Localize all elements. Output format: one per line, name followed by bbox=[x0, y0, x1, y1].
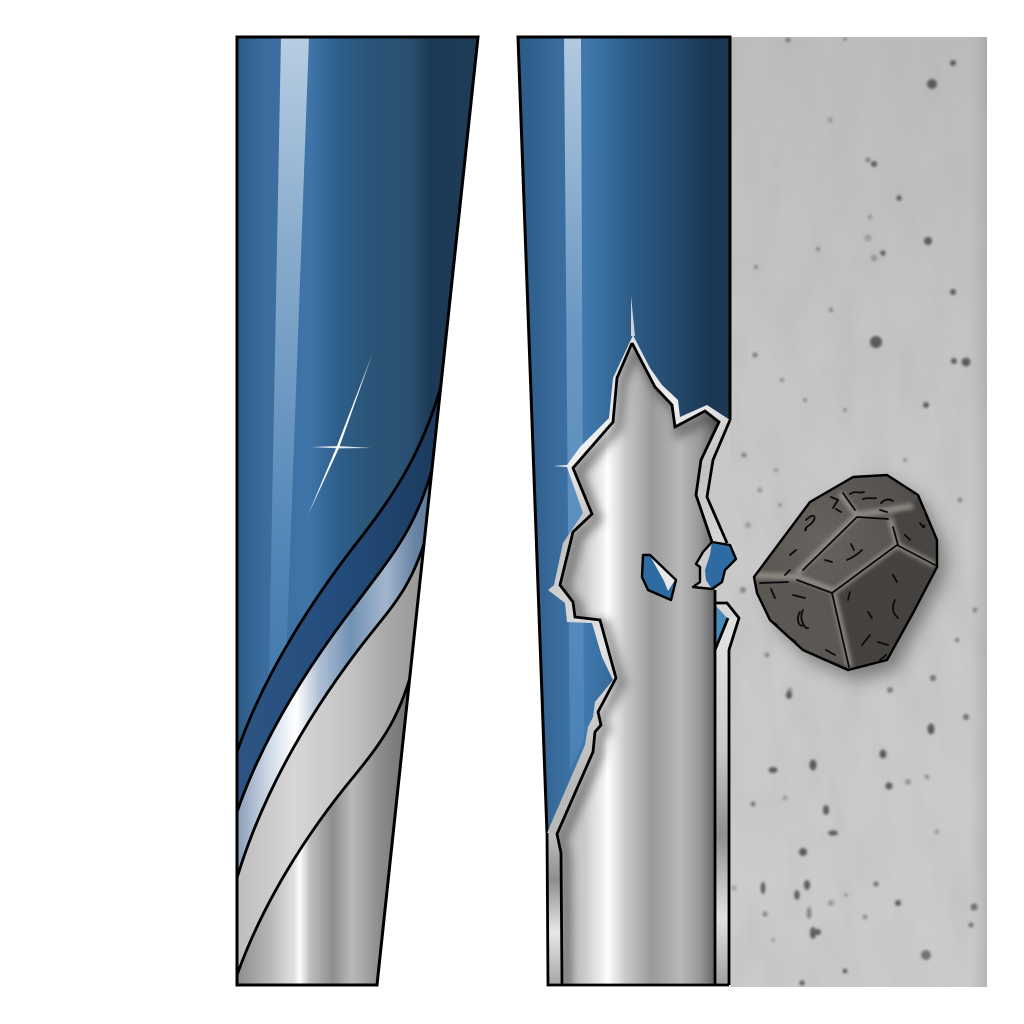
blue fragment on the chip edge bbox=[693, 542, 736, 589]
rock dark facets bbox=[756, 491, 936, 668]
band: bare metal bbox=[238, 678, 408, 984]
rock ridge lines and cracks bbox=[760, 492, 935, 667]
panel: concrete wall bbox=[700, 37, 987, 987]
scratch spike above the chip bbox=[631, 296, 635, 336]
blue coating bbox=[237, 37, 478, 985]
left metal strip bbox=[547, 833, 562, 985]
highlight stripe on left tube bbox=[268, 37, 309, 722]
chip edge lines bbox=[547, 343, 739, 985]
coating outline bbox=[518, 37, 730, 833]
isolated chip of blue coating bbox=[642, 555, 676, 600]
upper facet of right strip bbox=[715, 603, 739, 618]
rock body bbox=[754, 475, 937, 670]
right metal strip bbox=[715, 618, 739, 985]
exposed metal in the chip bbox=[557, 343, 719, 985]
icon: sparkle on coating bbox=[308, 355, 372, 515]
blue coating bbox=[518, 37, 730, 833]
layered bands of coating and metal bbox=[238, 387, 440, 984]
icon: impacting rock bbox=[750, 470, 945, 680]
band: pale blue transition bbox=[238, 470, 430, 868]
band: light grey layer bbox=[238, 542, 423, 966]
small blue shard in right strip bbox=[715, 605, 727, 646]
rock shadow bbox=[766, 485, 945, 680]
illustration: cutaway of coated tube and rock impact bbox=[236, 36, 987, 987]
panel: right tube section with chipped coating bbox=[518, 37, 739, 990]
torn rim of the coating bbox=[547, 335, 730, 985]
panel: left tube section bbox=[225, 37, 478, 1000]
rock outline bbox=[754, 475, 937, 670]
band: dark blue primer bbox=[238, 387, 440, 796]
left tube outline bbox=[237, 37, 478, 985]
highlight stripe on right tube bbox=[564, 37, 584, 770]
shadow inside the chip bbox=[562, 348, 724, 990]
